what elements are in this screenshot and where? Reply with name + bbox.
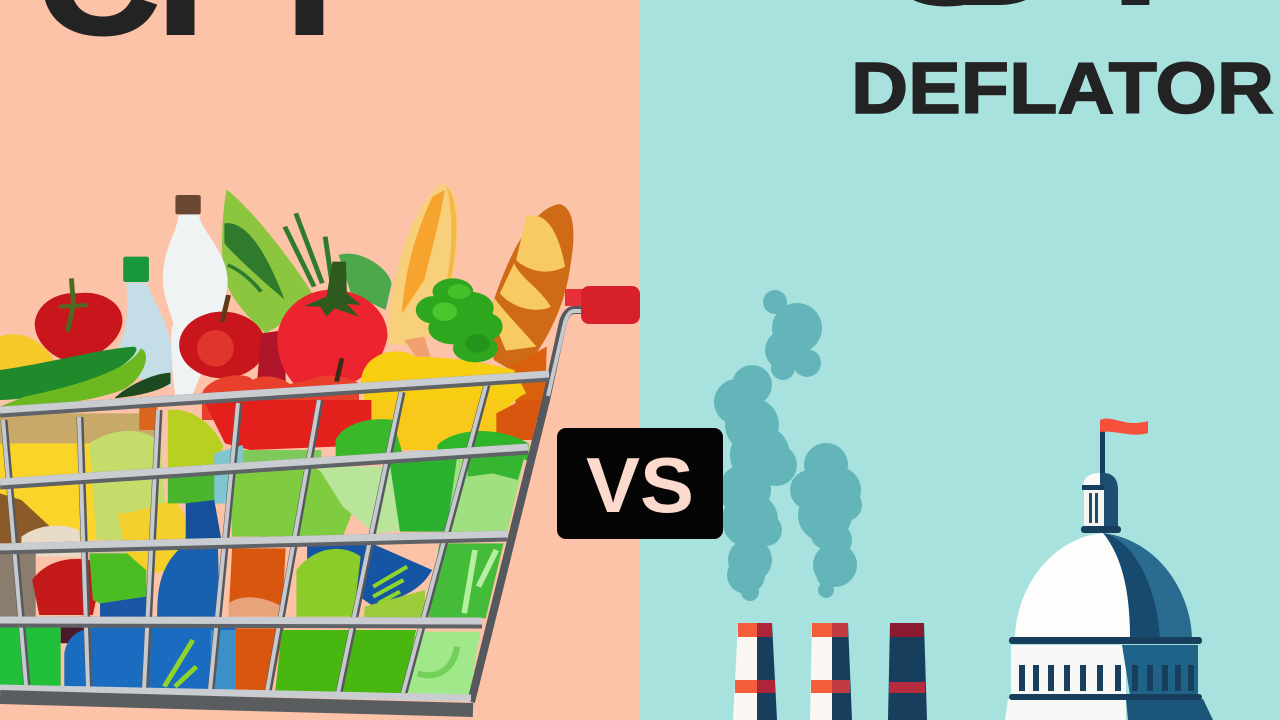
tomato middle bbox=[179, 295, 266, 378]
panel: GDP deflator background bbox=[640, 0, 1280, 720]
icon: basket contents bbox=[0, 400, 541, 695]
icon: shopping cart bbox=[0, 286, 640, 710]
baguette right bbox=[490, 204, 573, 377]
chimney right bbox=[888, 623, 927, 720]
lemon bbox=[0, 334, 55, 370]
cart wire highlights bbox=[3, 311, 581, 693]
leafy greens bbox=[222, 189, 392, 333]
base with columns bbox=[1005, 637, 1213, 720]
cart rear post bbox=[471, 310, 582, 702]
cucumbers bbox=[0, 347, 171, 407]
icon: factory chimneys bbox=[733, 623, 927, 720]
panel: CPI background bbox=[0, 0, 640, 720]
small green-cap bottle bbox=[118, 257, 171, 387]
VS badge bbox=[557, 428, 723, 539]
cart vertical wires bbox=[4, 385, 487, 693]
flag bbox=[1100, 418, 1148, 476]
large tomato bbox=[257, 262, 388, 383]
cart rail highlights bbox=[0, 374, 549, 698]
chimney left bbox=[733, 623, 777, 720]
tomatoes at rail bbox=[202, 358, 359, 420]
cart rails bbox=[0, 376, 549, 623]
VS text: VS bbox=[586, 441, 694, 529]
broccoli bbox=[416, 278, 503, 362]
chimney middle bbox=[810, 623, 852, 720]
tomato left bbox=[35, 278, 122, 362]
cart base bbox=[0, 697, 473, 710]
heading: deflator: DEFLATOR bbox=[851, 49, 1274, 129]
icon: factory smoke bbox=[714, 290, 862, 601]
cupola bbox=[1081, 473, 1121, 533]
cart handle bbox=[565, 286, 640, 324]
baguette left bbox=[388, 184, 458, 347]
dome bbox=[1015, 533, 1192, 640]
icon: capitol building bbox=[1005, 418, 1213, 720]
icon: groceries above basket bbox=[0, 184, 573, 420]
yellow peppers bbox=[361, 337, 547, 420]
water bottle large bbox=[163, 195, 228, 397]
